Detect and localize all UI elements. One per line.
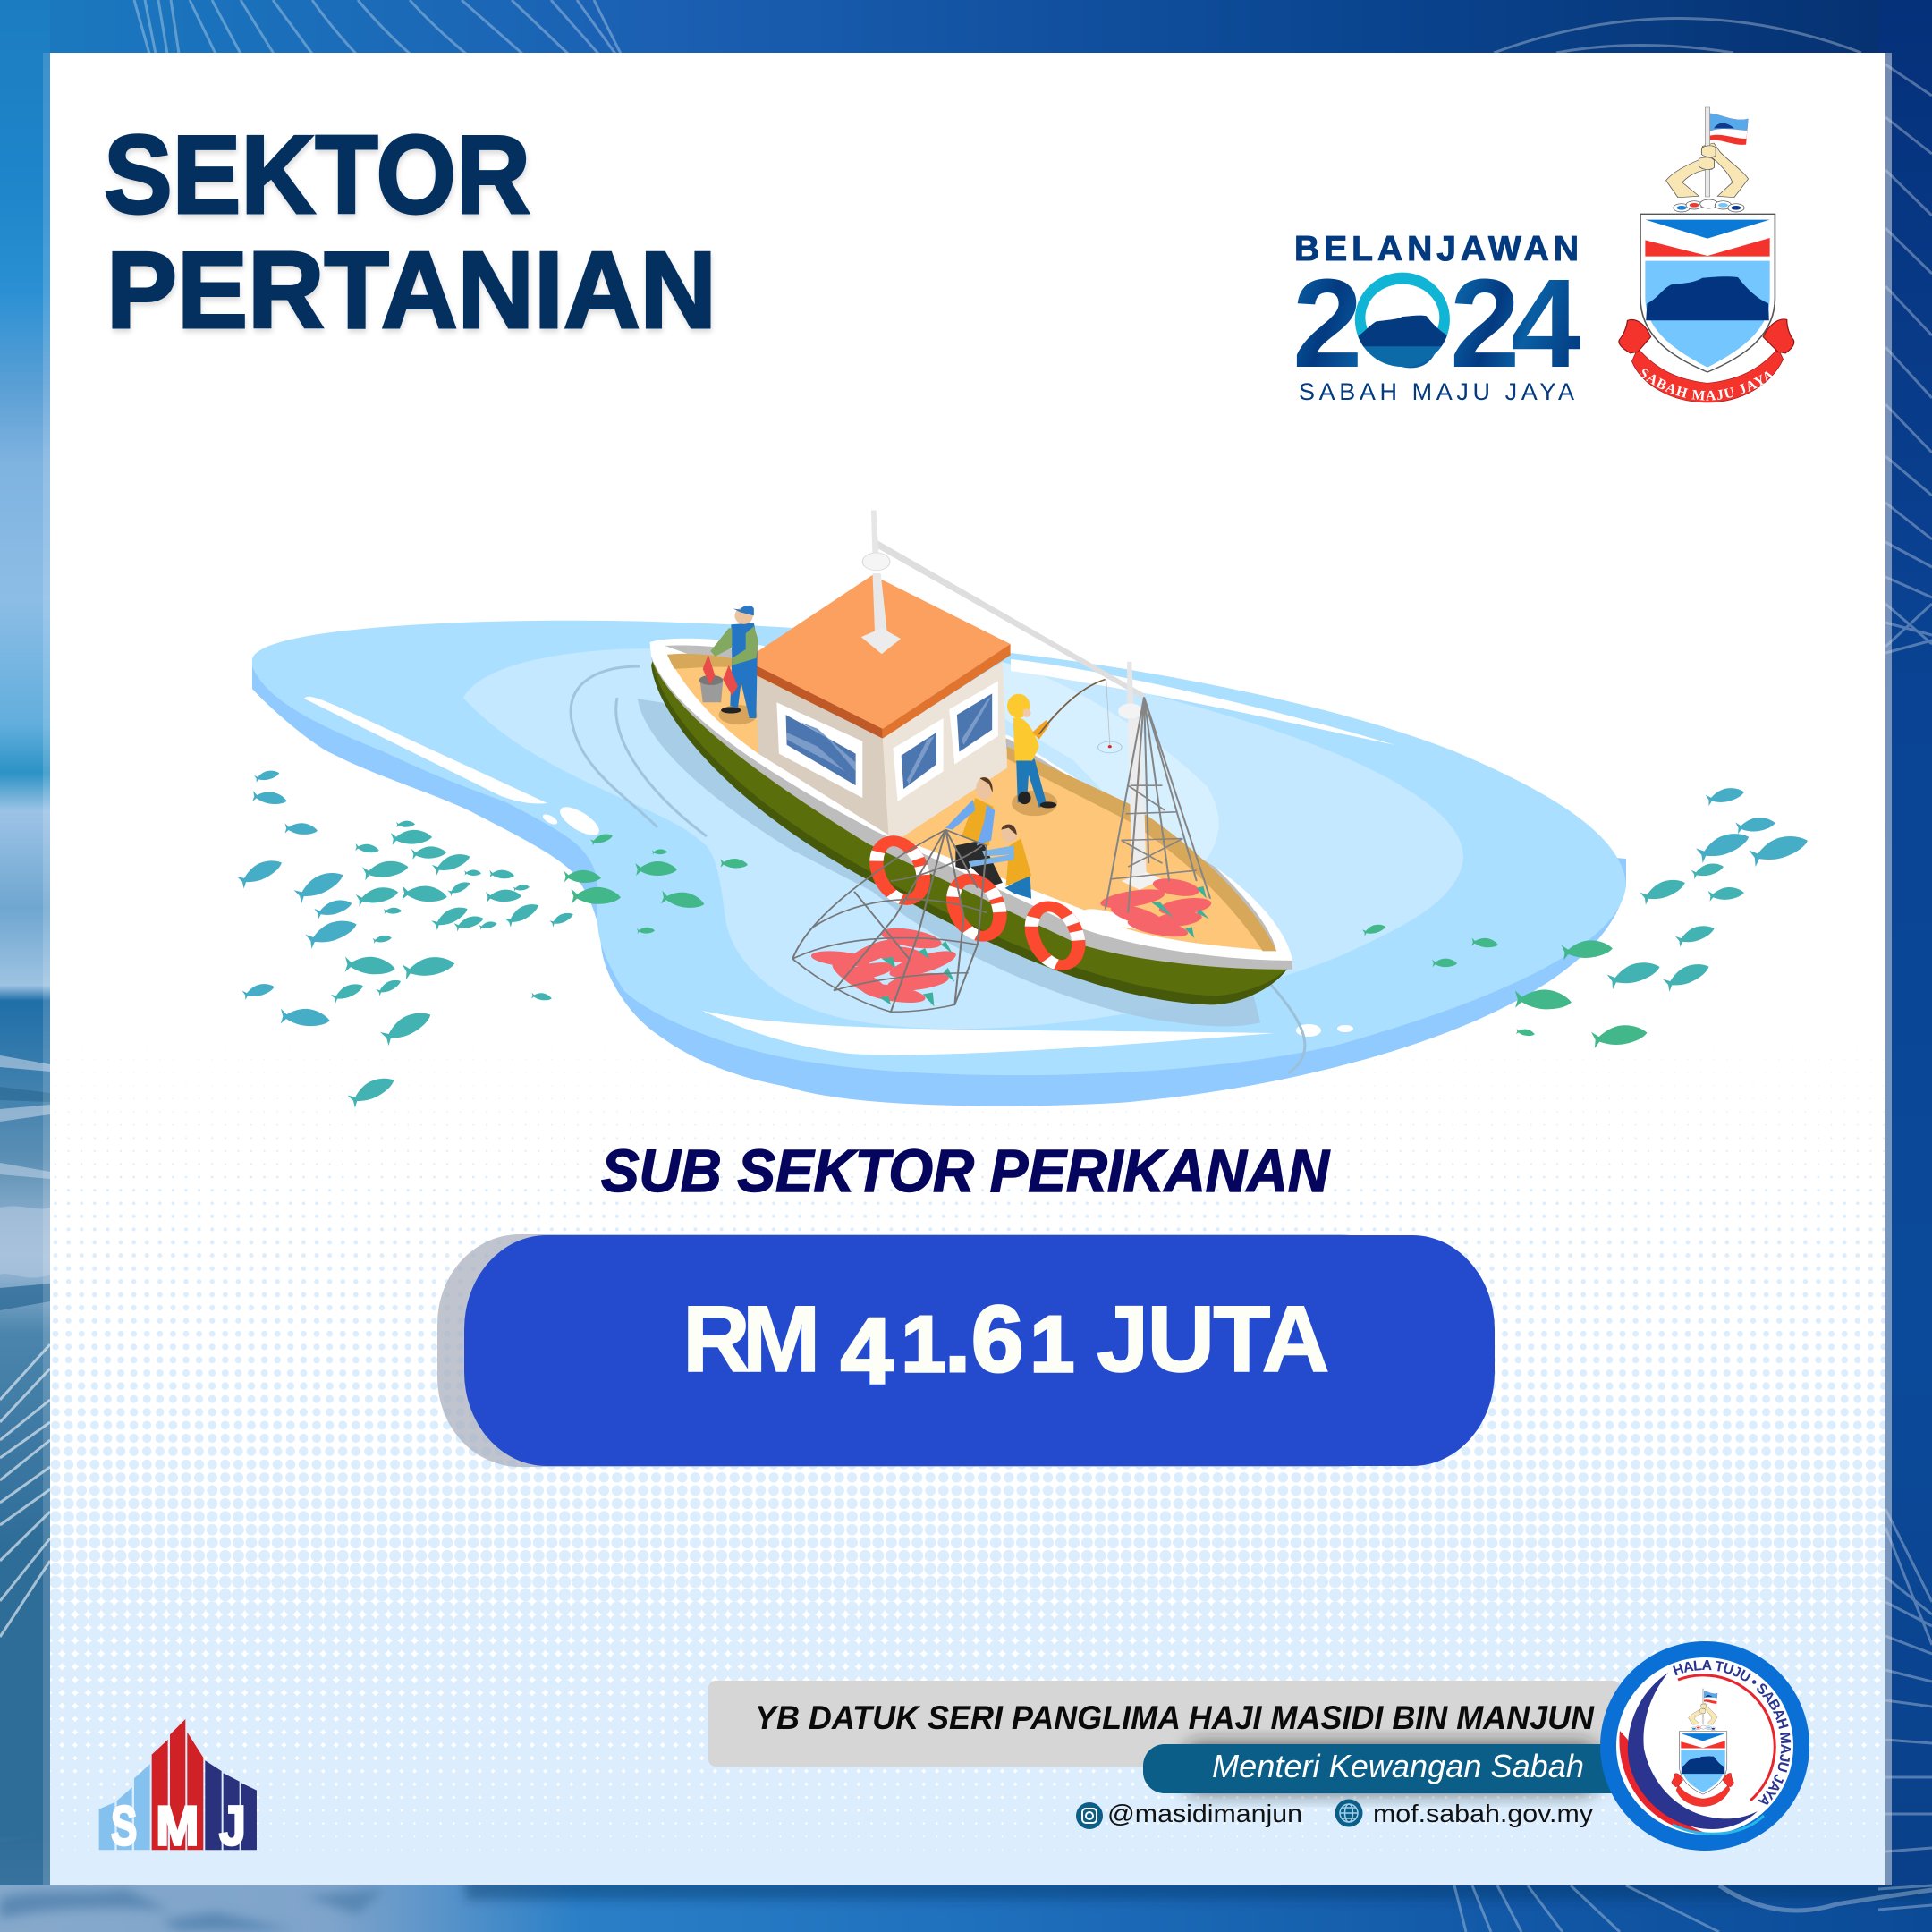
instagram handle: @masidimanjun (1107, 1800, 1302, 1827)
title: SEKTOR (104, 114, 530, 237)
hull (650, 639, 1292, 1004)
amount panel fill (464, 1235, 1495, 1466)
title (104, 114, 716, 351)
fish school (236, 768, 1810, 1108)
catch under the rear net (1098, 876, 1213, 940)
logo: SMJ: M (156, 1796, 199, 1858)
icon: globe (1335, 1800, 1363, 1826)
net lines: right (1878, 64, 1932, 1910)
logo zero with mountain (1352, 273, 1453, 369)
badge crest (1672, 1689, 1733, 1807)
water puddle illustration (252, 621, 1626, 1106)
cabin (745, 575, 1011, 838)
subheading: SUB SEKTOR PERIKANAN (601, 1138, 1331, 1205)
amount: 1 (902, 1300, 945, 1388)
minister name bar (708, 1681, 1621, 1767)
crest: Sabah coat of arms (1618, 107, 1794, 402)
logo heading: BELANJAWAN (1294, 230, 1579, 268)
rear mast net (1106, 697, 1210, 913)
minister title: Menteri Kewangan Sabah (1212, 1748, 1584, 1784)
left school: blue teal (236, 768, 1810, 1030)
amount: 1 (1030, 1300, 1074, 1388)
left school: teal (330, 821, 1744, 1108)
fishing boat illustration (638, 511, 1292, 1026)
amount panel shadow (437, 1234, 1421, 1467)
social handle (1076, 1800, 1302, 1829)
net lines: left (0, 1344, 50, 1637)
deck (665, 645, 1276, 951)
two fishermen hauling the net (945, 777, 1031, 899)
boat shadow on water (638, 699, 1260, 1026)
trap net (792, 830, 987, 1012)
minister title pill (1143, 1741, 1637, 1796)
badge: Hala Tuju Sabah Maju Jaya (1600, 1641, 1809, 1851)
amount panel (437, 1234, 1495, 1467)
crest scroll motto: SABAH MAJU JAYA (1639, 369, 1773, 401)
title: PERTANIAN (106, 229, 716, 351)
fisherman with bucket (699, 606, 758, 724)
amount: 4 (841, 1300, 893, 1403)
logo: Belanjawan 2024 (1292, 230, 1580, 405)
fisherman in yellow with rod (1007, 680, 1122, 816)
green fish in the water (564, 832, 1648, 1048)
amount: . (945, 1287, 970, 1392)
amount: JUTA (1097, 1287, 1328, 1392)
badge ring text: HALA TUJU • SABAH MAJU JAYA (1673, 1660, 1791, 1805)
amount: 6 (971, 1287, 1023, 1392)
icon: instagram (1076, 1802, 1103, 1829)
net lines: top (134, 0, 1861, 54)
catch in the trap net (810, 924, 960, 1006)
logo tagline: SABAH MAJU JAYA (1299, 378, 1574, 405)
minister name: YB DATUK SERI PANGLIMA HAJI MASIDI BIN MANJUN (755, 1699, 1595, 1736)
masts and boom (861, 511, 1162, 930)
halftone dot gradient (55, 1046, 1885, 1882)
net lines: bottom right (1454, 1885, 1932, 1932)
logo year digits: 2024 (1292, 252, 1580, 394)
website (1335, 1800, 1593, 1827)
logo: SMJ: J (219, 1796, 246, 1858)
logo: SMJ (99, 1719, 257, 1858)
amount: RM (682, 1287, 815, 1392)
lifebuoys (869, 837, 1086, 970)
website address: mof.sabah.gov.my (1373, 1800, 1593, 1827)
logo: SMJ: S (111, 1796, 137, 1858)
